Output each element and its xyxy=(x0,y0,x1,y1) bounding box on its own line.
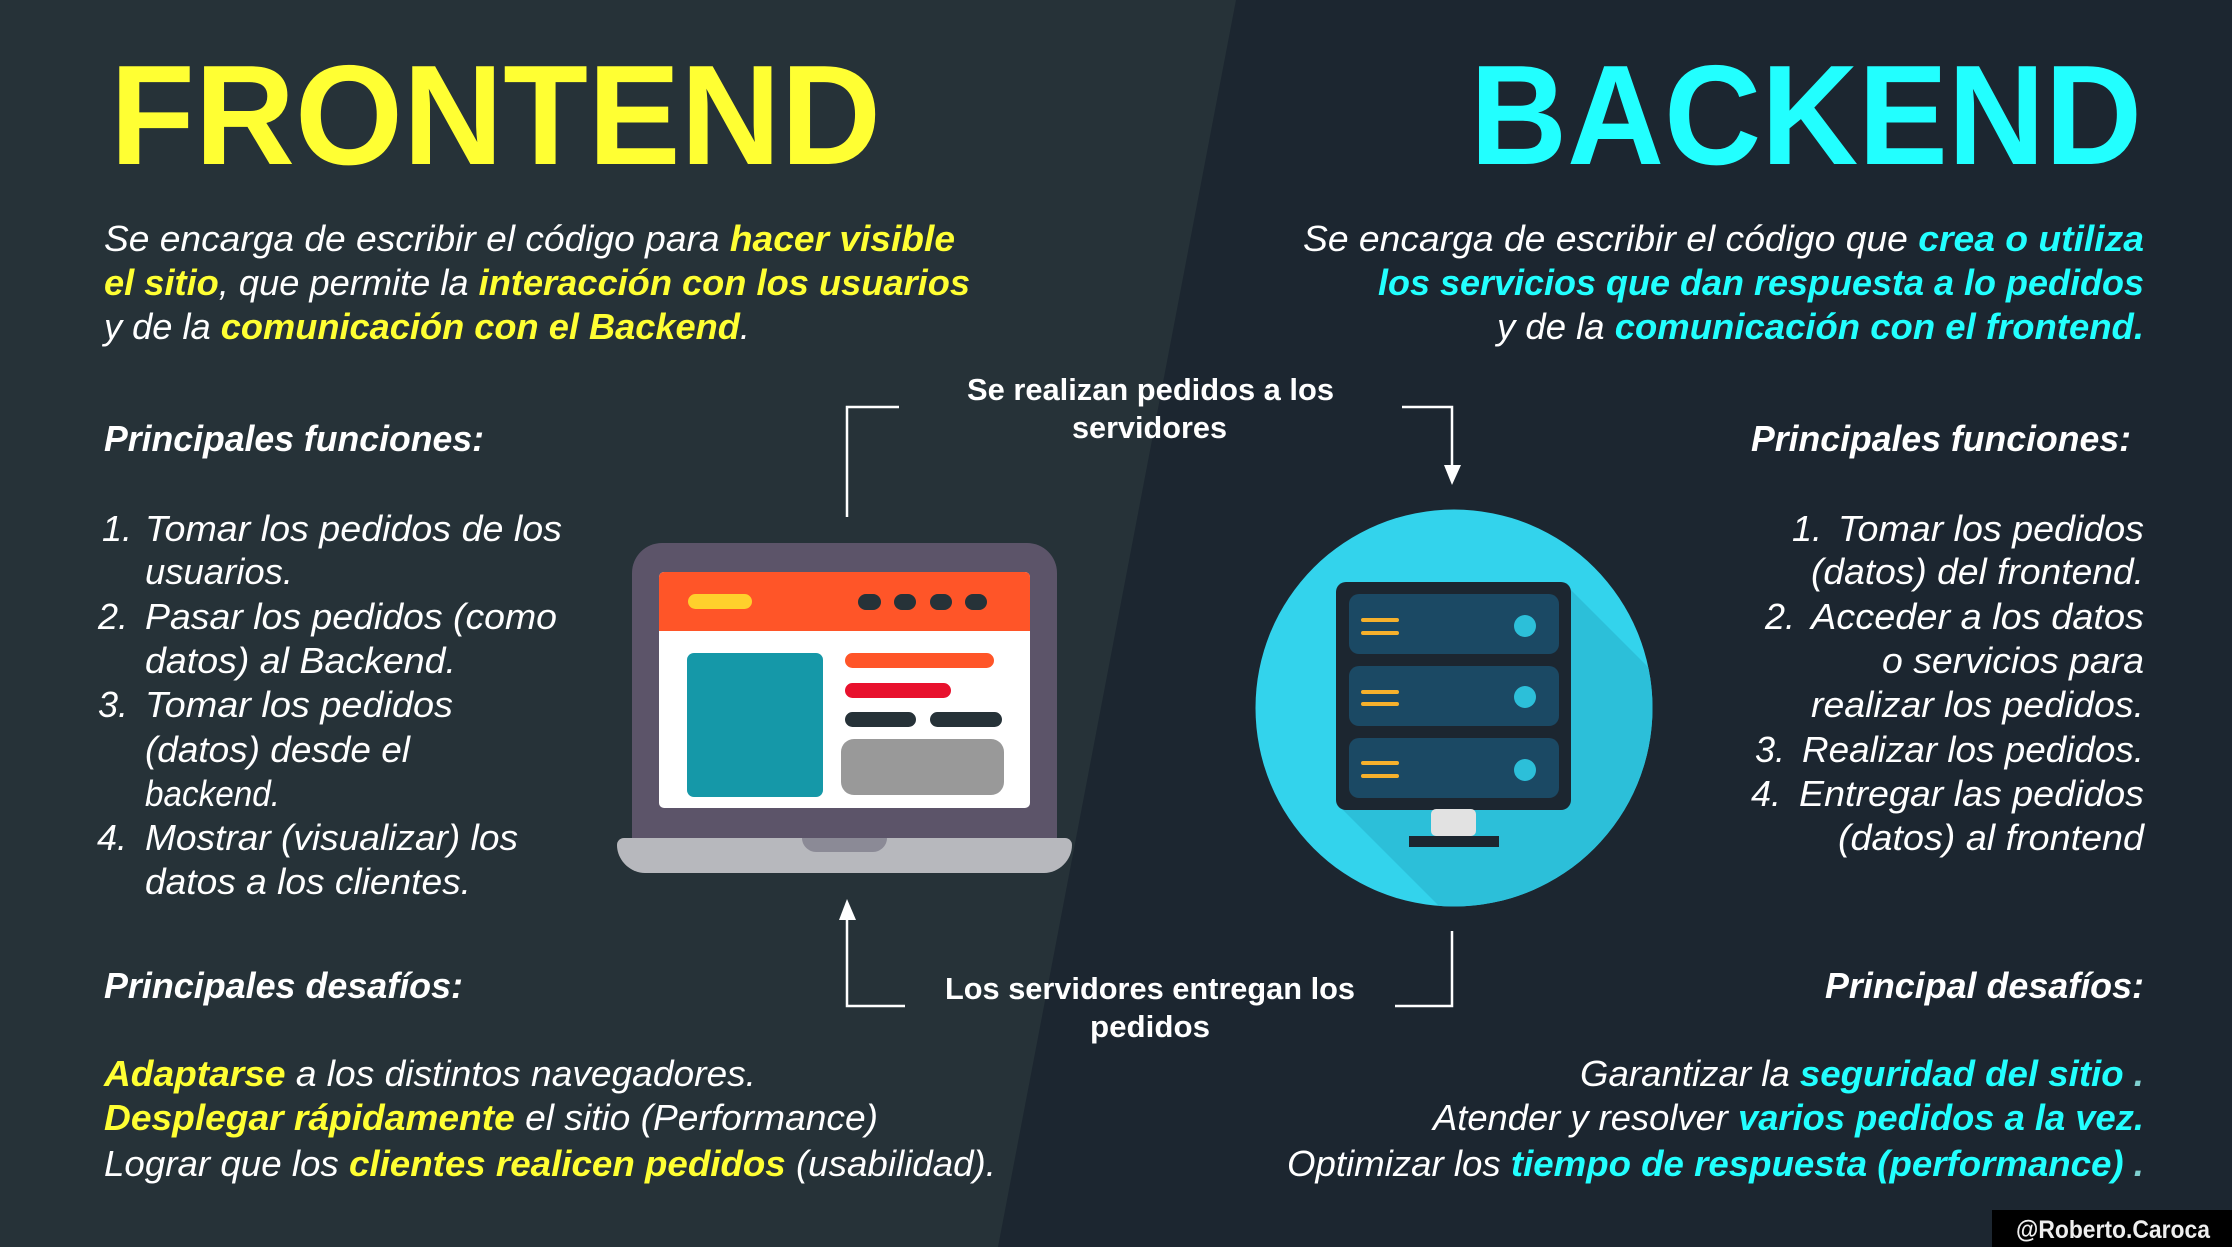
list: backend functions: 3. xyxy=(1755,729,1785,770)
text block: frontend challenges xyxy=(103,1053,996,1184)
label: servers deliver: Los servidores entregan los xyxy=(945,971,1355,1006)
intro text: backend: los servicios que dan respuesta a lo pedidos xyxy=(1378,262,2144,303)
title: FRONTEND: FRONTEND xyxy=(110,36,881,195)
arrow: label to laptop xyxy=(839,899,905,1006)
list: frontend functions: Tomar los pedidos de los xyxy=(145,508,562,549)
list: frontend functions: usuarios. xyxy=(145,551,293,592)
list: frontend functions: Tomar los pedidos xyxy=(145,684,453,725)
list: frontend functions: (datos) desde el xyxy=(145,729,411,770)
list: frontend functions: 1. xyxy=(102,508,132,549)
text block: backend challenges: Garantizar la seguridad del sitio . xyxy=(1580,1053,2144,1094)
intro text: backend xyxy=(1303,218,2144,347)
list: backend functions: Acceder a los datos xyxy=(1809,596,2144,637)
list: backend functions: 4. xyxy=(1751,773,1781,814)
list: frontend functions: backend. xyxy=(145,773,280,814)
arrow: label to server xyxy=(1402,407,1461,485)
icon: laptop xyxy=(617,543,1072,873)
list: frontend functions: 2. xyxy=(97,596,128,637)
panel: frontend xyxy=(97,36,996,1184)
arrow: server to label xyxy=(1395,931,1452,1006)
panel: backend xyxy=(1287,36,2145,1184)
heading: principales funciones: Principales funciones: xyxy=(104,418,484,459)
list: backend functions: (datos) al frontend xyxy=(1838,817,2145,858)
intro text: frontend: el sitio, que permite la interacción con los usuarios xyxy=(104,262,970,303)
panel: request flow xyxy=(617,378,1652,1044)
list: frontend functions: datos a los clientes. xyxy=(145,861,471,902)
heading: principales desafios: Principales desafíos: xyxy=(104,965,463,1006)
label: servers deliver xyxy=(945,971,1355,1044)
intro text: frontend: y de la comunicación con el Backend. xyxy=(101,306,750,347)
text block: frontend challenges: Lograr que los clientes realicen pedidos (usabilidad). xyxy=(104,1143,996,1184)
list: frontend functions: 4. xyxy=(97,817,127,858)
list: frontend functions: 3. xyxy=(98,684,128,725)
title: BACKEND: BACKEND xyxy=(1470,36,2142,195)
label: requests to servers xyxy=(967,372,1334,445)
list: frontend functions xyxy=(97,508,562,902)
text block: frontend challenges: Adaptarse a los distintos navegadores. xyxy=(103,1053,756,1094)
list: backend functions: Entregar las pedidos xyxy=(1799,773,2144,814)
list: backend functions: 1. xyxy=(1792,508,1822,549)
icon: server xyxy=(1256,510,1652,906)
watermark xyxy=(1992,1210,2232,1247)
text block: backend challenges xyxy=(1287,1053,2144,1184)
text block: frontend challenges: Desplegar rápidamente el sitio (Performance) xyxy=(104,1097,878,1138)
list: frontend functions: datos) al Backend. xyxy=(145,640,456,681)
list: backend functions: o servicios para xyxy=(1882,640,2144,681)
list: backend functions: (datos) del frontend. xyxy=(1811,551,2144,592)
watermark: @Roberto.Caroca xyxy=(2016,1216,2211,1244)
intro text: backend: Se encarga de escribir el código que crea o utiliza xyxy=(1303,218,2144,259)
label: servers deliver: pedidos xyxy=(1090,1009,1210,1044)
heading: principal desafios: Principal desafíos: xyxy=(1825,965,2144,1006)
intro text: frontend: Se encarga de escribir el código para hacer visible xyxy=(104,218,955,259)
list: backend functions: realizar los pedidos. xyxy=(1811,684,2144,725)
label: requests to servers: Se realizan pedidos a los xyxy=(967,372,1334,407)
list: frontend functions: Mostrar (visualizar) los xyxy=(145,817,518,858)
arrow: laptop to label xyxy=(847,407,899,517)
text block: backend challenges: Atender y resolver varios pedidos a la vez. xyxy=(1431,1097,2144,1138)
list: backend functions: Realizar los pedidos. xyxy=(1802,729,2144,770)
list: frontend functions: Pasar los pedidos (como xyxy=(145,596,557,637)
text block: backend challenges: Optimizar los tiempo de respuesta (performance) . xyxy=(1287,1143,2144,1184)
list: backend functions xyxy=(1751,508,2145,858)
label: requests to servers: servidores xyxy=(1072,410,1227,445)
intro text: frontend xyxy=(101,218,970,347)
list: backend functions: 2. xyxy=(1764,596,1795,637)
intro text: backend: y de la comunicación con el frontend. xyxy=(1494,306,2144,347)
list: backend functions: Tomar los pedidos xyxy=(1838,508,2144,549)
heading: principales funciones: Principales funciones: xyxy=(1751,418,2131,459)
